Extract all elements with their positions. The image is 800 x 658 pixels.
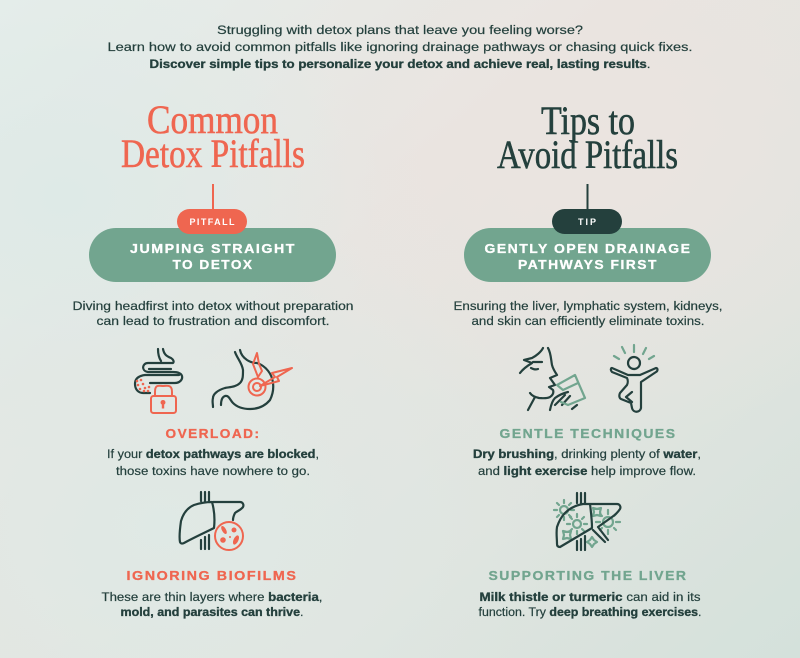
text: ignoring biofilms — [102, 590, 322, 619]
intro text — [108, 23, 692, 71]
text: pitfall description: can lead to frustration and discomfort. — [96, 314, 330, 328]
text: gentle techniques: and light exercise help improve flow. — [478, 464, 696, 478]
banner: gently open drainage pathways first — [464, 228, 711, 282]
text: pitfall description: Diving headfirst into detox without preparation — [72, 299, 354, 313]
heading: tips to avoid pitfalls — [497, 98, 678, 177]
heading: supporting the liver: SUPPORTING THE LIVER — [488, 568, 688, 583]
text: supporting the liver: Milk thistle or turmeric can aid in its — [480, 590, 700, 604]
heading: ignoring biofilms: IGNORING BIOFILMS — [126, 568, 298, 583]
text: overload: If your detox pathways are blocked , — [107, 447, 319, 461]
text: supporting the liver: function. Try deep breathing exercises. — [478, 605, 702, 619]
heading: overload: OVERLOAD: — [166, 426, 260, 441]
text: tip description: Ensuring the liver, lymphatic system, kidneys, — [454, 299, 722, 313]
text: tip description: and skin can efficiently eliminate toxins. — [472, 314, 704, 328]
banner: gently open drainage pathways first: GENTLY OPEN DRAINAGE — [484, 241, 692, 256]
heading: common detox pitfalls — [121, 97, 305, 176]
badge: pitfall: PITFALL — [190, 217, 235, 227]
badge: tip — [552, 209, 622, 234]
text: gentle techniques — [473, 447, 701, 478]
icon: liver with sparkles — [554, 493, 620, 550]
banner: jumping straight to detox: JUMPING STRAIGHT — [130, 241, 296, 256]
intro text: Learn how to avoid common pitfalls like ignoring drainage pathways or chasing quick fixes. — [108, 40, 692, 54]
icon: blocked intestine with lock — [135, 349, 182, 413]
heading: gentle techniques: GENTLE TECHNIQUES — [500, 426, 676, 441]
badge: tip: TIP — [578, 217, 596, 227]
text: gentle techniques: Dry brushing , drinking plenty of water, — [473, 447, 701, 461]
icon: face drinking water — [520, 348, 585, 410]
connector: tip — [586, 184, 588, 212]
text: overload: those toxins have nowhere to go. — [116, 464, 310, 478]
icon: tree pose figure — [611, 345, 658, 412]
heading: common detox pitfalls: Common — [147, 97, 278, 142]
banner: jumping straight to detox: TO DETOX — [172, 257, 254, 272]
badge: pitfall — [177, 209, 247, 234]
text: ignoring biofilms: mold, and parasites can thrive. — [120, 605, 304, 619]
connector: pitfall — [212, 184, 214, 212]
intro text: Struggling with detox plans that leave you feeling worse? — [217, 23, 583, 37]
text: pitfall description — [72, 299, 354, 328]
text: ignoring biofilms: These are thin layers where bacteria , — [102, 590, 322, 604]
intro text: Discover simple tips to personalize your detox and achieve real, lasting results . — [150, 57, 650, 71]
banner: jumping straight to detox — [89, 228, 336, 282]
heading: tips to avoid pitfalls: Tips to — [541, 98, 635, 143]
text: tip description — [454, 299, 722, 328]
text: overload — [107, 447, 319, 478]
heading: tips to avoid pitfalls: Avoid Pitfalls — [497, 132, 678, 177]
icon: stomach with pain — [213, 350, 292, 409]
text: supporting the liver — [478, 590, 702, 619]
icon: liver with biofilm — [180, 492, 243, 550]
banner: gently open drainage pathways first: PATHWAYS FIRST — [518, 257, 658, 272]
heading: common detox pitfalls: Detox Pitfalls — [121, 131, 305, 176]
